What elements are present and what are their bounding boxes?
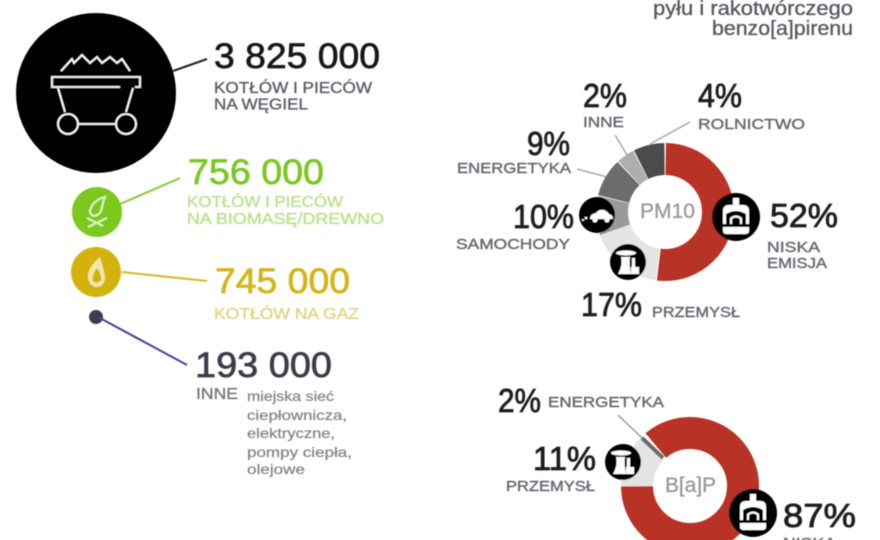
- icon: car: [579, 197, 615, 233]
- label: 11% przemysł: [506, 440, 596, 495]
- number: other boilers: 193 000: [195, 346, 332, 385]
- icon: stove: [712, 193, 760, 241]
- label: 17% przemysł: [581, 286, 740, 323]
- label: coal boilers: [214, 78, 373, 114]
- text block: other types: elektryczne,: [247, 425, 335, 441]
- label: 2% energetyka: [498, 382, 664, 419]
- label: 10% samochody: SAMOCHODY: [456, 236, 570, 253]
- heading: pollutants: benzo[a]pirenu: [712, 18, 853, 40]
- label: 2% energetyka: ENERGETYKA: [548, 394, 664, 411]
- donut label: B[a]P: B[a]P: [665, 474, 716, 497]
- label: other: INNE: [196, 386, 238, 403]
- label: 10% samochody: [456, 198, 574, 253]
- icon: factory: [610, 244, 646, 280]
- label: 9% energetyka: 9%: [527, 125, 570, 162]
- label: 2% inne: [583, 77, 627, 131]
- number: gas boilers: 745 000: [215, 262, 350, 301]
- label: 52% niska emisja: EMISJA: [767, 255, 827, 272]
- panel: biomass boilers: [72, 153, 384, 237]
- connector lines: PM10: [577, 122, 690, 177]
- text block: other types: ciepłownicza,: [247, 407, 347, 423]
- label: biomass boilers: KOTŁÓW I PIECÓW: [187, 192, 344, 211]
- chart: B[a]P donut: [498, 382, 856, 540]
- panel: gas boilers: [71, 247, 359, 323]
- icon: biomass fire: [72, 187, 122, 237]
- label: 52% niska emisja: NISKA: [767, 239, 820, 256]
- label: 9% energetyka: ENERGETYKA: [457, 160, 571, 177]
- panel: other boilers: [89, 310, 352, 477]
- chart: PM10 donut: [456, 77, 838, 323]
- connector: coal: [173, 59, 207, 71]
- label: 2% energetyka: 2%: [498, 382, 541, 419]
- panel: coal boilers: [16, 13, 380, 173]
- label: 4% rolnictwo: 4%: [698, 77, 742, 114]
- text block: other types: pompy ciepła,: [247, 444, 352, 460]
- text block: other types: olejowe: [247, 461, 305, 477]
- donut segments: PM10: [590, 137, 740, 287]
- label: 11% przemysł: 11%: [533, 440, 596, 477]
- number: biomass boilers: 756 000: [188, 153, 324, 192]
- label: coal boilers: NA WĘGIEL: [214, 96, 308, 114]
- label: 4% rolnictwo: ROLNICTWO: [698, 116, 805, 133]
- label: coal boilers: KOTŁÓW I PIECÓW: [214, 78, 373, 97]
- text block: other types: [247, 388, 352, 477]
- label: 4% rolnictwo: [698, 77, 805, 133]
- label: 2% inne: 2%: [583, 77, 627, 114]
- label: 17% przemysł: PRZEMYSŁ: [652, 304, 740, 321]
- icon: dot: [89, 310, 103, 324]
- label: biomass boilers: NA BIOMASĘ/DREWNO: [187, 211, 384, 228]
- icon: gas flame: [71, 247, 121, 297]
- connector: gas: [122, 272, 207, 281]
- label: biomass boilers: [187, 192, 384, 228]
- icon: coal cart: [16, 13, 176, 173]
- label: 9% energetyka: [457, 125, 571, 177]
- icon: stove: [729, 489, 777, 537]
- connector: other: [98, 317, 187, 365]
- label: 11% przemysł: PRZEMYSŁ: [506, 478, 595, 495]
- label: 17% przemysł: 17%: [581, 286, 642, 323]
- icon: factory: [605, 444, 641, 480]
- heading: pollutants: [653, 0, 853, 40]
- donut segments: B[a]P: [615, 411, 765, 540]
- label: 10% samochody: 10%: [513, 198, 574, 235]
- label: 52% niska emisja: 52%: [770, 197, 838, 234]
- label: 52% niska emisja: [767, 197, 838, 272]
- label: gas boilers: KOTŁÓW NA GAZ: [214, 304, 359, 323]
- connector: biomass: [120, 178, 180, 204]
- label: 2% inne: INNE: [583, 114, 624, 131]
- donut label: PM10: PM10: [640, 200, 695, 223]
- connector line: energetyka: [618, 415, 663, 458]
- label: 87% niska: 87%: [783, 497, 856, 534]
- number: coal boilers: 3 825 000: [214, 37, 380, 76]
- text block: other types: miejska sieć: [247, 388, 334, 404]
